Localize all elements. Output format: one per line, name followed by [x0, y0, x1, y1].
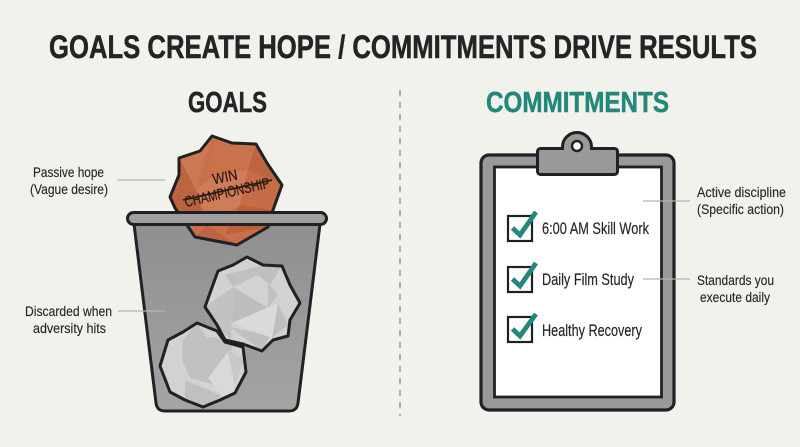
icon: crumpled grey paper upper	[204, 256, 302, 352]
heading: goals: GOALS	[188, 87, 267, 119]
icon: trash bin rim	[128, 212, 326, 224]
label: standards you execute daily: execute daily	[700, 289, 770, 305]
icon: crumpled orange paper	[168, 134, 284, 246]
label: discarded when adversity hits	[25, 303, 165, 336]
label: standards you execute daily	[643, 272, 774, 305]
label: standards you execute daily: Standards you	[697, 272, 774, 288]
label: discarded when adversity hits: Discarded when	[25, 303, 112, 319]
checklist item: film study: Daily Film Study	[542, 271, 635, 289]
icon: crumpled grey paper lower	[158, 322, 248, 408]
clipboard clip	[538, 132, 618, 174]
checklist item: film study	[508, 263, 635, 292]
icon: trash bin body	[134, 224, 320, 411]
label: active discipline: (Specific action)	[697, 201, 784, 217]
label: passive hope: (Vague desire)	[30, 181, 108, 197]
checklist item: skill work: 6:00 AM Skill Work	[542, 220, 650, 238]
heading: commitments: COMMITMENTS	[486, 87, 669, 119]
label: discarded when adversity hits: adversity hits	[33, 320, 106, 336]
checklist item: recovery	[508, 314, 643, 342]
icon: clipboard	[481, 132, 674, 410]
checklist item: skill work	[508, 212, 650, 241]
label: passive hope	[30, 164, 165, 197]
checklist item: recovery: Healthy Recovery	[542, 322, 643, 340]
clipboard paper	[494, 167, 662, 397]
label: active discipline: Active discipline	[697, 184, 786, 200]
text: championship crossed out: CHAMPIONSHIP	[183, 175, 272, 211]
label: active discipline	[643, 184, 786, 217]
label: passive hope: Passive hope	[33, 164, 104, 180]
text: win: WIN	[211, 167, 239, 188]
